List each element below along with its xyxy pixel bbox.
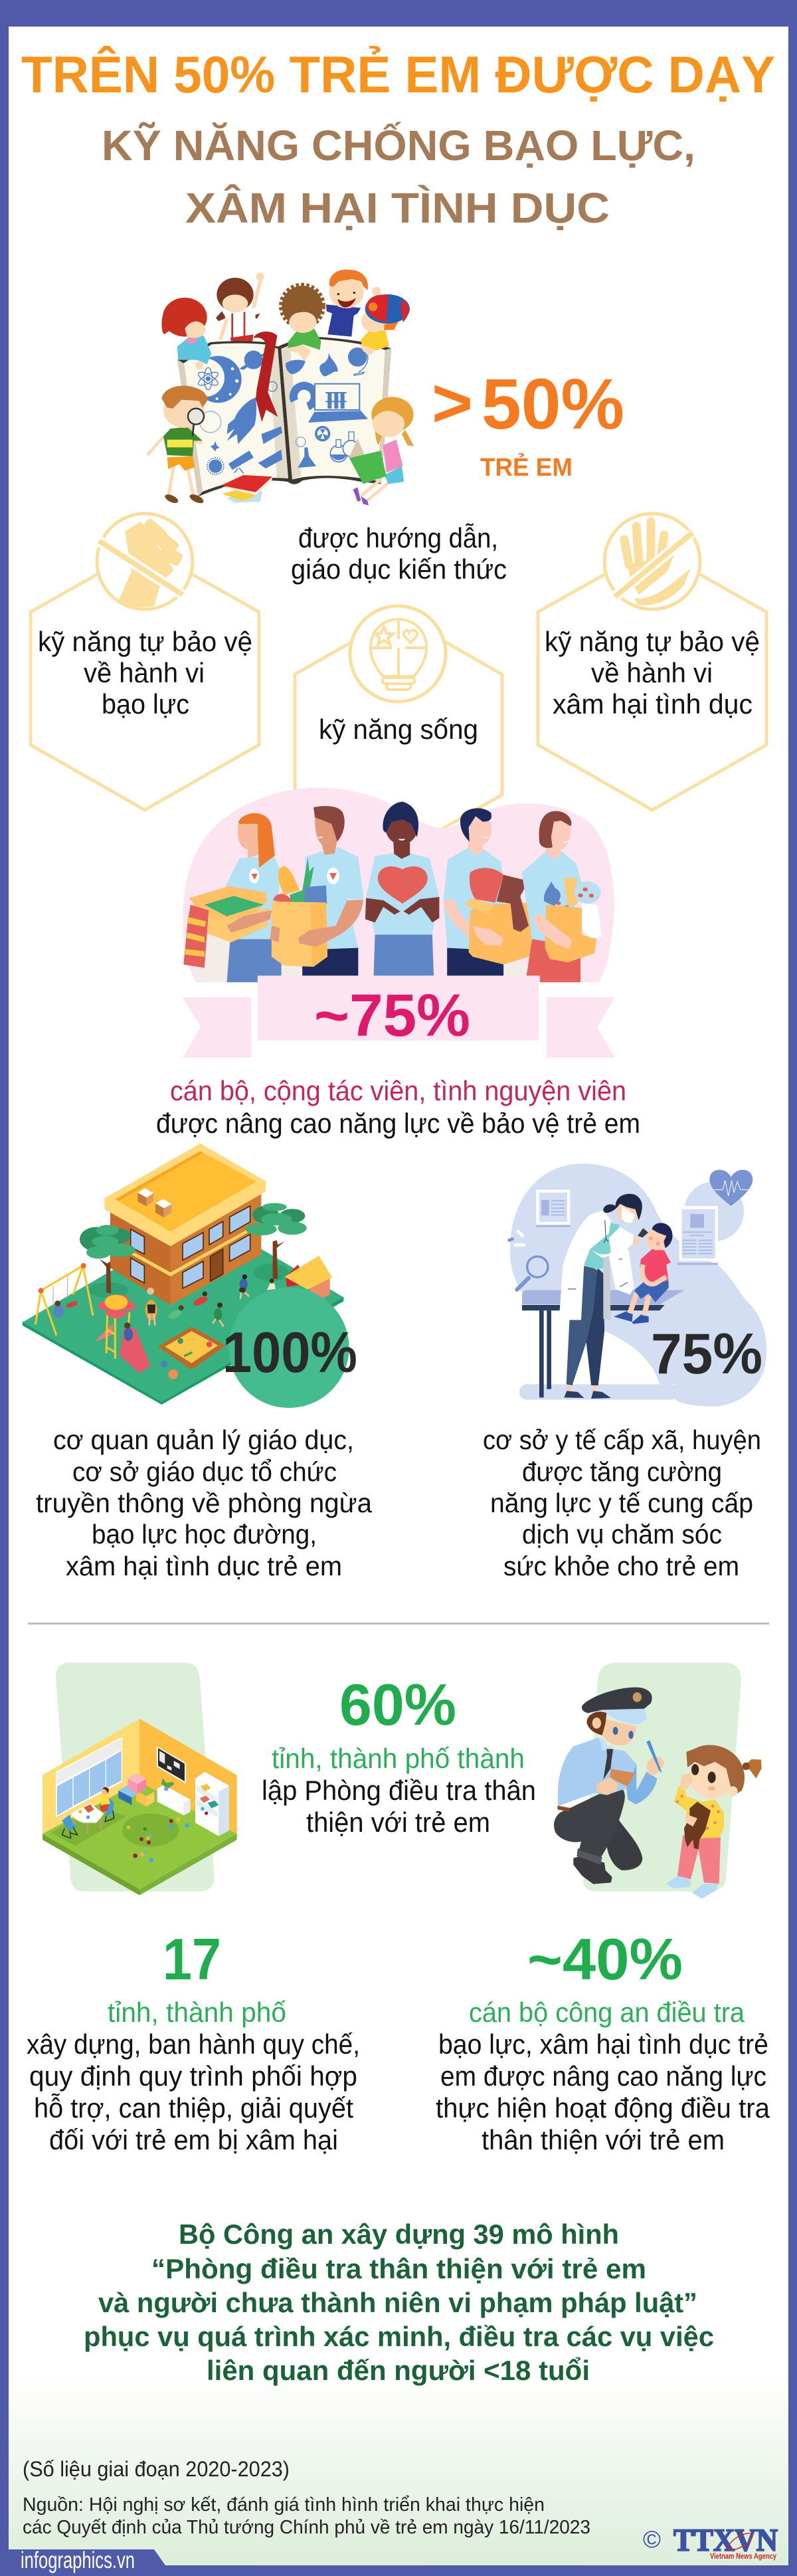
volunteer 2 with grocery bag (270, 806, 364, 975)
hexagon: life skills (295, 606, 502, 854)
source note: các Quyết định của Thủ tướng Chính phủ về trẻ em ngày 16/11/2023 (23, 2517, 590, 2538)
school building (104, 1143, 266, 1305)
doghouse (284, 1256, 332, 1298)
website label: infographics.vn (21, 2547, 135, 2573)
text: staff and volunteers: được nâng cao năng lực về bảo vệ trẻ em (156, 1108, 640, 1139)
icon: crossed fist (99, 518, 184, 607)
crying girl (666, 1745, 762, 1899)
text: health facilities: năng lực y tế cung cấp (490, 1488, 753, 1518)
heart with pulse (709, 1170, 753, 1206)
description: bạo lực, xâm hại tình dục trẻ (438, 2029, 768, 2060)
description: em được nâng cao năng lực (440, 2060, 766, 2092)
volunteer 5 with bag (522, 811, 602, 982)
description (262, 1743, 536, 1838)
stat: more than 50% of children (432, 363, 624, 482)
text: health facilities (483, 1425, 761, 1581)
text: education agencies: bạo lực học đường, (92, 1519, 317, 1549)
text: bạo lực (102, 688, 189, 720)
window with blind (56, 1737, 122, 1817)
text: education agencies: cơ sở giáo dục tổ chức (72, 1456, 337, 1487)
highlighted statement: 39 models (84, 2219, 714, 2386)
text: guided and educated: giáo dục kiến thức (291, 553, 507, 585)
stat: 60% of provinces: 60% (339, 1672, 456, 1737)
number ~75%: ~75% (314, 983, 470, 1049)
highlighted statement: 39 models: Bộ Công an xây dựng 39 mô hình (179, 2219, 619, 2250)
logo: TTXVN: Vietnam News Agency (710, 2551, 776, 2561)
pink blob background (183, 787, 614, 982)
illustration: five volunteers on pink blob (183, 787, 614, 982)
sandbox (157, 1327, 226, 1370)
science doodles on the pages (187, 347, 368, 474)
illustration: school with playground (23, 1143, 349, 1408)
text: kỹ năng sống (319, 714, 478, 745)
description: tỉnh, thành phố (108, 1997, 286, 2028)
kids behind the book (216, 270, 381, 342)
highlighted statement: 39 models: “Phòng điều tra thân thiện với trẻ em (151, 2253, 646, 2284)
policeman (554, 1688, 664, 1884)
number 100%: 100% (222, 1321, 357, 1385)
description: thiện với trẻ em (306, 1807, 490, 1838)
description: cán bộ công an điều tra (469, 1997, 745, 2028)
text (545, 626, 760, 720)
volunteer 4 with bag and teddy bear (444, 808, 540, 975)
icon: crossed hand (615, 522, 691, 605)
boy with magnifier (147, 386, 209, 505)
description: hỗ trợ, can thiệp, giải quyết (34, 2092, 353, 2124)
text: education agencies: xâm hại tình dục trẻ em (66, 1551, 342, 1581)
text: staff and volunteers: cán bộ, cộng tác viên, tình nguyện viên (170, 1075, 626, 1106)
boy on table (614, 1223, 673, 1324)
illustration: doctor examining a child (507, 1163, 766, 1407)
highlighted statement: 39 models: và người chưa thành niên vi phạm pháp luật” (98, 2287, 697, 2318)
stat: 60% of provinces (262, 1672, 536, 1838)
volunteer 3 holding a heart (365, 802, 439, 975)
description: thân thiện với trẻ em (482, 2124, 725, 2155)
highlighted statement: 39 models: phục vụ quá trình xác minh, điều tra các vụ việc (84, 2321, 714, 2352)
children and teacher (145, 1274, 276, 1327)
source note (23, 2494, 590, 2538)
text: health facilities: dịch vụ chăm sóc (522, 1519, 722, 1549)
text (38, 626, 252, 720)
number 75%: 75% (651, 1322, 762, 1386)
stat: 17 provinces: 17 (163, 1926, 221, 1992)
title line 2: KỸ NĂNG CHỐNG BẠO LỰC, (102, 122, 695, 169)
text: về hành vi (591, 657, 713, 688)
highlighted statement: 39 models: liên quan đến người <18 tuổi (207, 2355, 590, 2386)
footer gradient background (9, 2372, 788, 2568)
description: lập Phòng điều tra thân (262, 1775, 536, 1806)
text: xâm hại tình dục (553, 688, 753, 720)
swing set (35, 1263, 93, 1336)
text: về hành vi (84, 657, 205, 688)
illustration: child-friendly room (43, 1662, 237, 1895)
description (436, 1997, 770, 2155)
note: data period: (Số liệu giai đoạn 2020-2023) (23, 2457, 290, 2481)
table and child (62, 1787, 114, 1838)
text: staff and volunteers (156, 1075, 640, 1139)
text: health facilities: cơ sở y tế cấp xã, huyện (483, 1425, 761, 1455)
ribbon centre (258, 976, 539, 1040)
text: health facilities: được tăng cường (522, 1456, 722, 1487)
icon: puzzle light bulb (371, 619, 426, 690)
text: education agencies (36, 1425, 372, 1581)
stack of books (221, 475, 272, 503)
girl reading (349, 397, 414, 506)
number 50%: 50% (482, 363, 624, 444)
text: health facilities: sức khỏe cho trẻ em (503, 1551, 739, 1581)
description (27, 1997, 360, 2155)
kid with curly hair (280, 284, 324, 361)
stat: 17 provinces (27, 1926, 360, 2155)
description: quy định quy trình phối hợp (29, 2060, 357, 2092)
description: tỉnh, thành phố thành (272, 1743, 525, 1774)
text: kỹ năng tự bảo vệ (38, 626, 252, 657)
stat: about 40% of police investigators (436, 1926, 770, 2155)
lawn (23, 1219, 343, 1405)
magnifying glass (517, 1256, 548, 1290)
logo: TTXVN: © (643, 2526, 661, 2553)
slide tower (94, 1294, 151, 1373)
bookmark ribbon (254, 332, 278, 422)
scattered toys (127, 1817, 189, 1862)
kid with red hair (161, 298, 211, 369)
logo: TTXVN (643, 2523, 778, 2561)
hexagon: self-protection against sexual abuse (538, 514, 766, 810)
pills (507, 1229, 525, 1246)
text: education agencies: cơ quan quản lý giáo dục, (53, 1425, 354, 1455)
pale blue blobs (510, 1163, 766, 1407)
illustration: policeman and crying girl (554, 1662, 762, 1899)
ribbon banner with 75% (183, 976, 615, 1058)
volunteer 1 with box and scarf (183, 813, 282, 982)
logo: TTXVN: TTXVN (673, 2523, 778, 2558)
green circle behind 100% (228, 1288, 349, 1408)
description: xây dựng, ban hành quy chế, (27, 2029, 360, 2060)
room shell (43, 1719, 237, 1895)
title line 3: XÂM HẠI TÌNH DỤC (185, 183, 610, 232)
pale green panel (583, 1662, 741, 1892)
bookshelf (195, 1772, 229, 1836)
text: guided and educated: được hướng dẫn, (298, 522, 498, 553)
title (21, 45, 775, 232)
wall chart left (536, 1190, 571, 1227)
description: thực hiện hoạt động điều tra (436, 2092, 770, 2124)
sideboard with plant (157, 1779, 191, 1815)
examination table (522, 1290, 685, 1397)
ribbon tails (183, 997, 615, 1058)
open book (177, 337, 391, 496)
description: đối với trẻ em bị xâm hại (49, 2124, 338, 2155)
text: education agencies: truyền thông về phòng ngừa (36, 1488, 372, 1518)
greater-than sign: > (432, 365, 473, 442)
wall chart right (677, 1206, 718, 1265)
title line 1: TRÊN 50% TRẺ EM ĐƯỢC DẠY (21, 45, 775, 104)
notice board (157, 1746, 186, 1783)
toy blocks (118, 1773, 154, 1807)
hexagon: self-protection against violence (31, 514, 259, 810)
text: kỹ năng tự bảo vệ (545, 626, 760, 657)
stat: about 40% of police investigators: ~40% (527, 1926, 683, 1992)
kid with cap (360, 294, 410, 355)
pale green panel (56, 1662, 215, 1892)
trees (80, 1203, 307, 1294)
doctor (559, 1194, 648, 1399)
text: guided and educated (291, 522, 507, 585)
illustration: children around a science book (147, 270, 414, 506)
source note: Nguồn: Hội nghị sơ kết, đánh giá tình hình triển khai thực hiện (23, 2494, 545, 2516)
label: children: TRẺ EM (480, 452, 573, 482)
